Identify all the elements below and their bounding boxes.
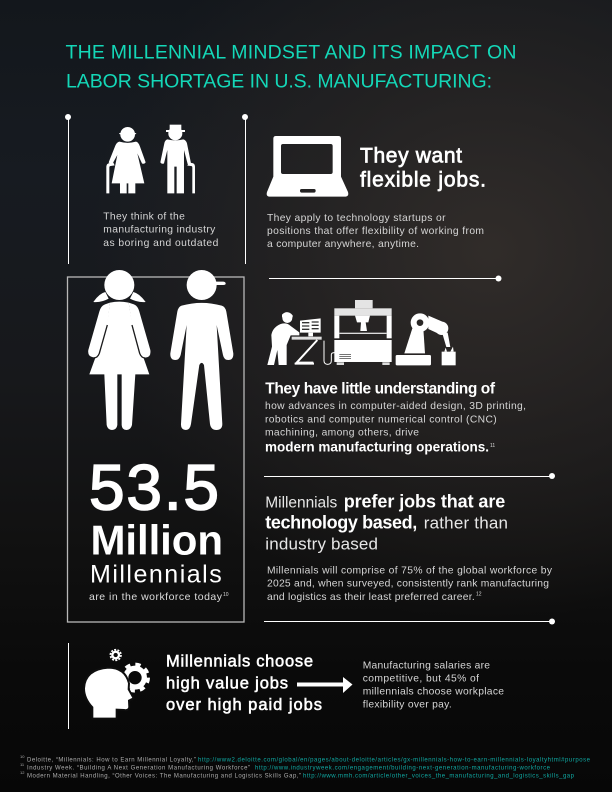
title xyxy=(66,41,516,92)
arrow xyxy=(297,677,352,693)
footnotes: http://www.mmh.com/article/other_voices_the_manufacturing_and_logistics_skills_gap xyxy=(303,774,575,780)
text: salaries: Manufacturing salaries are xyxy=(363,660,490,671)
text: salaries: competitive, but 45% of xyxy=(363,674,479,685)
text: salaries xyxy=(363,660,504,710)
footnotes: Industry Week. “Building A Next Generation Manufacturing Workforce” xyxy=(27,766,250,772)
panel: technology based jobs xyxy=(264,492,555,624)
heading: they want flexible jobs: flexible jobs. xyxy=(360,169,486,192)
text: little understanding: 11 xyxy=(490,443,495,449)
title: LABOR SHORTAGE IN U.S. MANUFACTURING: xyxy=(66,70,492,92)
text: little understanding: machining, among others, drive xyxy=(265,428,419,439)
footnotes: Deloitte, “Millennials: How to Earn Millennial Loyalty,” xyxy=(27,758,196,764)
stat: 53.5 million millennials: 53.5 xyxy=(89,451,219,523)
heading: they want flexible jobs: They want xyxy=(360,144,462,167)
text: little understanding: how advances in computer-aided design, 3D printing, xyxy=(265,401,526,412)
text: workforce statistic: 2025 and, when surveyed, consistently rank manufacturing xyxy=(267,579,549,590)
panel: manufacturing understanding xyxy=(264,300,555,479)
footnotes: http://www.industryweek.com/engagement/building-next-generation-manufacturing-workforce xyxy=(255,766,551,772)
footnotes xyxy=(20,754,591,780)
stat: 53.5 million millennials: Million xyxy=(90,516,223,563)
text: technology startups xyxy=(267,213,484,250)
icon: head with gears xyxy=(84,650,148,719)
text: high value over high paid: Millennials choose xyxy=(166,653,313,671)
heading: prefer technology jobs: industry based xyxy=(265,534,378,553)
heading: prefer technology jobs: technology based, xyxy=(265,512,417,532)
title: THE MILLENNIAL MINDSET AND ITS IMPACT ON xyxy=(66,41,516,63)
text: workforce statistic xyxy=(267,565,553,603)
heading: prefer technology jobs: Millennials xyxy=(265,495,338,512)
footnotes: 11 xyxy=(20,762,25,767)
icon: young woman and man xyxy=(88,270,233,430)
icon: worker at workstation xyxy=(267,312,335,365)
panel: older perception xyxy=(65,114,248,264)
panel: high value jobs xyxy=(68,643,504,729)
text: boring and outdated: as boring and outdated xyxy=(103,238,219,249)
footnotes: 12 xyxy=(20,770,25,775)
text: high value over high paid: over high paid jobs xyxy=(166,696,322,714)
heading: they want flexible jobs xyxy=(360,144,486,192)
footnotes: http://www2.deloitte.com/global/en/pages/about-deloitte/articles/gx-millennials-how-to-earn-millennials-loyaltyhtml#purpose xyxy=(198,758,591,764)
text: boring and outdated: They think of the xyxy=(103,211,185,222)
text: technology startups: a computer anywhere, anytime. xyxy=(267,239,419,250)
stat: 53.5 million millennials xyxy=(89,451,229,603)
text: workforce statistic: and logistics as their least preferred career. xyxy=(267,592,475,603)
text: little understanding: robotics and computer numerical control (CNC) xyxy=(265,414,497,425)
text: technology startups: They apply to technology startups or xyxy=(267,213,446,224)
heading: prefer technology jobs: prefer jobs that are xyxy=(344,492,505,512)
text: salaries: millennials choose workplace xyxy=(363,686,504,697)
text: technology startups: positions that offer flexibility of working from xyxy=(267,226,484,237)
footnotes: 10 xyxy=(20,754,25,759)
stat: 53.5 million millennials: are in the workforce today xyxy=(89,591,223,603)
panel: 53.5 million millennials xyxy=(68,270,244,622)
text: high value over high paid: high value jobs xyxy=(166,674,288,692)
text: workforce statistic: 12 xyxy=(476,592,482,598)
text: boring and outdated: manufacturing industry xyxy=(103,225,216,236)
text: high value over high paid xyxy=(166,653,322,714)
text: little understanding: modern manufacturing operations. xyxy=(265,440,489,455)
icon: robot arm xyxy=(396,313,456,365)
text: salaries: flexibility over pay. xyxy=(363,699,452,710)
icon: cnc machine xyxy=(334,300,392,365)
text: boring and outdated xyxy=(103,211,219,249)
heading: prefer technology jobs xyxy=(265,492,508,553)
stat: 53.5 million millennials: 10 xyxy=(223,592,229,598)
text: little understanding xyxy=(265,380,526,455)
icon: elderly couple xyxy=(106,125,195,193)
panel: flexible jobs xyxy=(267,136,502,282)
heading: prefer technology jobs: rather than xyxy=(424,513,508,532)
footnotes: Modern Material Handling, “Other Voices: The Manufacturing and Logistics Skills Gap,” xyxy=(27,774,301,780)
stat: 53.5 million millennials: Millennials xyxy=(90,561,222,589)
text: little understanding: They have little understanding of xyxy=(265,380,496,397)
icon: laptop xyxy=(267,136,348,197)
text: workforce statistic: Millennials will comprise of 75% of the global workforce by xyxy=(267,565,553,576)
